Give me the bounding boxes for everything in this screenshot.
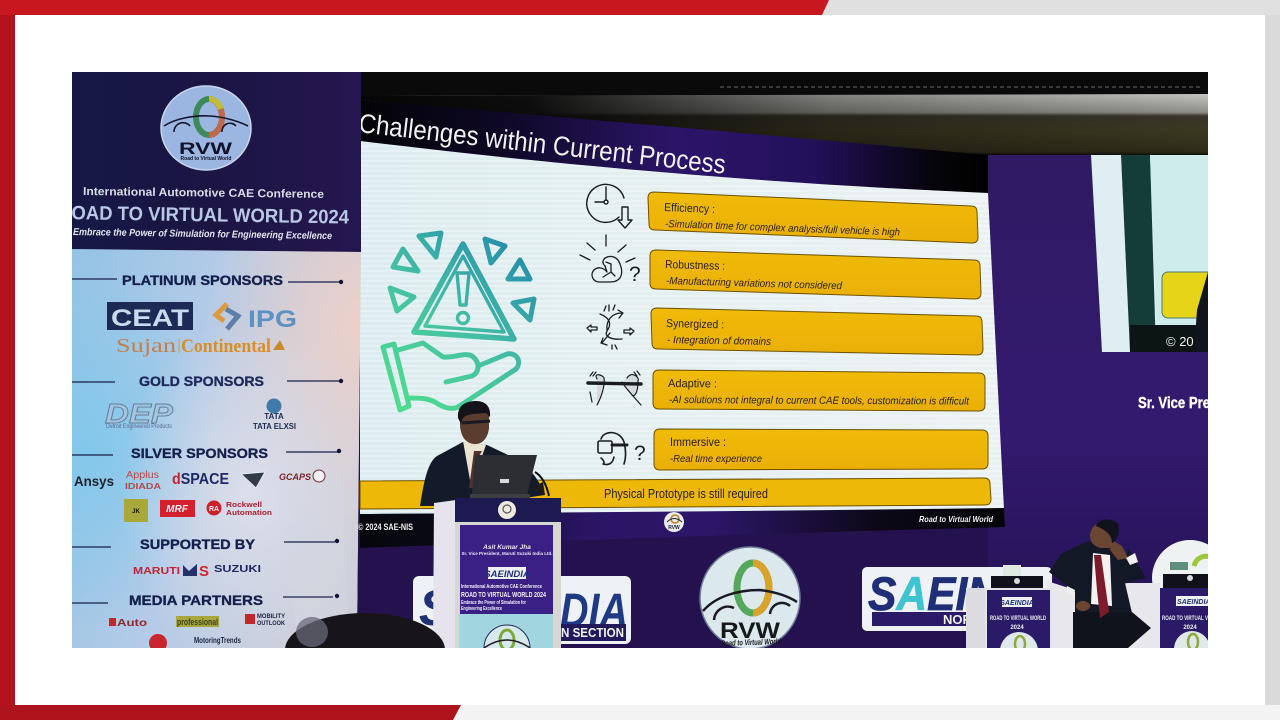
figure: seated panelist bbox=[1049, 519, 1151, 648]
heading: conference title: ROAD TO VIRTUAL WORLD 2024 bbox=[58, 202, 349, 229]
card: Efficiency: -Simulation time for complex analysis/full vehicle is high bbox=[665, 218, 900, 239]
heading: supported by: SUPPORTED BY bbox=[140, 536, 256, 552]
heading: silver sponsors: SILVER SPONSORS bbox=[131, 445, 268, 461]
logo: Sujan Continental: Continental bbox=[181, 336, 271, 357]
card: Immersive: Immersive : bbox=[670, 437, 726, 449]
icon: warning triangle in hand bbox=[383, 233, 534, 410]
text: podium name bbox=[462, 544, 552, 556]
bar: physical prototype bbox=[360, 478, 991, 509]
logo: RVW stage circle: Road to Virtual World bbox=[721, 637, 782, 648]
logo: SAEINDIA behind podium bbox=[413, 576, 631, 644]
logo: Sujan Continental: Sujan bbox=[116, 335, 176, 357]
logo: Applus IDIADA bbox=[125, 469, 161, 491]
logo: Auto: Auto bbox=[117, 618, 147, 629]
logo: SAEINDIA North: SAEIN bbox=[868, 567, 999, 620]
logo: chevron mark bbox=[241, 472, 265, 488]
card: Efficiency bbox=[648, 192, 978, 243]
card: Adaptive: Adaptive : bbox=[668, 378, 717, 390]
logo: Rockwell Automation bbox=[206, 500, 272, 517]
logo: Rockwell Automation: RA bbox=[209, 506, 219, 513]
panel: second screen bbox=[1091, 155, 1208, 352]
figure: speaker bbox=[420, 401, 549, 506]
logo: Auto bbox=[109, 618, 147, 629]
logo: Mobility Outlook: OUTLOOK bbox=[257, 620, 285, 627]
text: speaker caption on wall: Sr. Vice Pre bbox=[1138, 395, 1210, 412]
logo: SAEINDIA North: NOR bbox=[943, 612, 972, 627]
raised hand bbox=[1110, 540, 1128, 560]
logo: podium RVW bbox=[484, 624, 530, 648]
text: podium conference title: ROAD TO VIRTUAL WORLD 2024 bbox=[461, 592, 546, 599]
text: podium conference title bbox=[461, 584, 546, 612]
photo: conference stage bbox=[58, 72, 1228, 687]
slide title: Challenges within Current Process bbox=[357, 108, 727, 180]
logo: Tata Elxsi: TATA ELXSI bbox=[253, 422, 296, 431]
logo: Applus IDIADA: Applus bbox=[126, 469, 159, 481]
logo: Motoring Trends: MotoringTrends bbox=[194, 636, 241, 645]
foreground: audience head bbox=[285, 613, 445, 687]
icon: VR headset with question mark bbox=[598, 433, 646, 465]
logo: DEP: DEP bbox=[105, 398, 173, 429]
heading: gold sponsors: GOLD SPONSORS bbox=[139, 374, 264, 389]
card: Efficiency: Efficiency : bbox=[664, 202, 715, 216]
banner lower section bbox=[72, 249, 361, 648]
heading: media partners bbox=[72, 592, 339, 608]
logo: Applus IDIADA: IDIADA bbox=[125, 481, 161, 491]
text: podium conference title: International Automotive CAE Conference bbox=[461, 584, 542, 590]
panel: small podium left: SAEINDIA bbox=[1000, 600, 1034, 607]
logo: RVW banner circle: Road to Virtual World bbox=[181, 156, 231, 162]
heading: gold sponsors bbox=[72, 374, 343, 389]
slide title band bbox=[360, 100, 988, 193]
icon: podium seal bbox=[498, 501, 516, 519]
card: Robustness bbox=[650, 250, 981, 299]
logo: RVW stage circle bbox=[700, 547, 800, 649]
logo: SAEINDIA North bbox=[862, 567, 1052, 631]
heading: platinum sponsors: PLATINUM SPONSORS bbox=[122, 273, 283, 288]
icon: hands bending bar bbox=[588, 371, 641, 405]
logo: SAEINDIA behind podium: N SECTION bbox=[561, 626, 624, 640]
ceiling bbox=[360, 72, 1208, 155]
logo: Mobility Outlook: MOBILITY bbox=[257, 613, 286, 620]
panel: second screen: © 20 bbox=[1166, 334, 1194, 349]
logo: IPG: IPG bbox=[248, 306, 297, 333]
icon: VR headset with question mark: ? bbox=[634, 442, 646, 465]
panel: small podium left: ROAD TO VIRTUAL WORLD bbox=[990, 616, 1046, 622]
slide footer band bbox=[360, 508, 1005, 548]
panel: small podium right: 2024 bbox=[1183, 625, 1197, 631]
logo: CEAT: CEAT bbox=[111, 305, 189, 332]
slide scanlines bbox=[360, 141, 1004, 514]
cuff and lap hand bbox=[1066, 586, 1075, 596]
card: Immersive bbox=[654, 429, 988, 470]
logo: GCAPS bbox=[279, 470, 325, 483]
panel: small podium left bbox=[966, 565, 1052, 670]
logo: RVW stage circle: RVW bbox=[720, 618, 780, 643]
logo: DEP: Detroit Engineered Products bbox=[106, 423, 173, 430]
logo: MRF bbox=[160, 500, 195, 517]
heading: supported by bbox=[72, 536, 339, 552]
logo: red circle bbox=[149, 634, 167, 652]
icon: diverging arrows bbox=[587, 305, 634, 349]
panel: small podium right: ROAD TO VIRTUAL V bbox=[1162, 616, 1208, 622]
logo: Tata Elxsi bbox=[253, 398, 296, 431]
heading: media partners: MEDIA PARTNERS bbox=[129, 592, 263, 608]
logo: Mobility Outlook bbox=[245, 613, 286, 627]
logo: GCAPS: GCAPS bbox=[279, 472, 312, 483]
jacket bbox=[1049, 541, 1146, 613]
text: podium conference title: Engineering Excellence bbox=[461, 606, 502, 612]
panel: sponsor banner bbox=[58, 72, 362, 652]
icon: slide footer logo: RVW bbox=[668, 525, 680, 531]
text: conference tagline: Embrace the Power of Simulation for Engineering Excellence bbox=[73, 227, 332, 242]
panel: small podium right bbox=[1160, 574, 1210, 667]
heading: conference name: International Automotive CAE Conference bbox=[83, 186, 324, 201]
card: Robustness: Robustness : bbox=[665, 259, 725, 273]
text: podium name: Asit Kumar Jha bbox=[482, 544, 531, 551]
bar: physical prototype: Physical Prototype is still required bbox=[604, 487, 768, 501]
head bbox=[1090, 522, 1114, 548]
card: Synergized bbox=[651, 308, 983, 355]
text: slide copyright: © 2024 SAE-NIS bbox=[358, 522, 413, 532]
logo: Ansys: Ansys bbox=[74, 473, 114, 489]
text: podium conference title: Embrace the Power of Simulation for bbox=[461, 600, 526, 606]
logo: MRF: MRF bbox=[166, 504, 189, 515]
panel: small podium left: 2024 bbox=[1010, 625, 1024, 631]
card: Robustness: -Manufacturing variations not considered bbox=[666, 275, 843, 292]
card: Adaptive bbox=[653, 370, 985, 411]
logo: SAEINDIA behind podium: DIA bbox=[560, 585, 628, 638]
logo: dSPACE: dSPACE bbox=[172, 471, 229, 488]
logo: CEAT bbox=[107, 302, 193, 332]
legs bbox=[1073, 612, 1151, 648]
card: Adaptive: -AI solutions not integral to current CAE tools, customization is difficult bbox=[669, 394, 970, 408]
logo: Jet mark bbox=[124, 499, 148, 522]
logo: professional: professional bbox=[177, 617, 218, 627]
purple stage wall bbox=[988, 155, 1208, 587]
chair bbox=[1047, 581, 1163, 648]
panel: main slide bbox=[357, 100, 1005, 548]
card: Synergized: - Integration of domains bbox=[667, 334, 772, 348]
logo: Maruti Suzuki bbox=[133, 563, 261, 580]
card: Synergized: Synergized : bbox=[666, 318, 724, 331]
laptop bbox=[470, 455, 537, 498]
icon: flexed arm with question mark: ? bbox=[629, 263, 641, 286]
logo: Rockwell Automation: Automation bbox=[226, 508, 272, 517]
logo: RVW banner circle: RVW bbox=[179, 139, 233, 158]
logo: SAEINDIA behind podium: S bbox=[419, 580, 452, 636]
podium bbox=[433, 498, 561, 648]
text: podium name: Sr. Vice President, Maruti Suzuki India Ltd. bbox=[462, 551, 552, 556]
icon: clock with down arrow bbox=[587, 184, 632, 228]
card: Immersive: -Real time experience bbox=[670, 453, 762, 465]
logo: Jet mark: JK bbox=[132, 509, 141, 515]
panel: small podium right: SAEINDIA bbox=[1177, 599, 1210, 606]
logo: RVW at far right bbox=[1152, 540, 1208, 588]
slide body bbox=[360, 141, 1004, 514]
logo: podium SAEINDIA: SAEINDIA bbox=[484, 569, 530, 580]
shirt bbox=[1091, 553, 1112, 606]
logo: Tata Elxsi: TATA bbox=[264, 412, 284, 421]
heading: silver sponsors bbox=[72, 445, 341, 461]
icon: flexed arm with question mark bbox=[580, 235, 641, 286]
icon: slide footer logo bbox=[664, 512, 684, 532]
logo: Maruti Suzuki: S bbox=[199, 563, 209, 580]
logo: Maruti Suzuki: SUZUKI bbox=[214, 564, 261, 575]
text: slide footer tagline: Road to Virtual World bbox=[919, 514, 994, 524]
logo: Sujan Continental bbox=[116, 335, 285, 357]
heading: platinum sponsors bbox=[72, 273, 343, 288]
logo: RVW banner circle bbox=[161, 86, 251, 170]
tie bbox=[1094, 555, 1109, 618]
logo: IPG bbox=[216, 304, 297, 333]
logo: Rockwell Automation: Rockwell bbox=[226, 500, 262, 509]
logo: Maruti Suzuki: MARUTI bbox=[133, 566, 180, 577]
